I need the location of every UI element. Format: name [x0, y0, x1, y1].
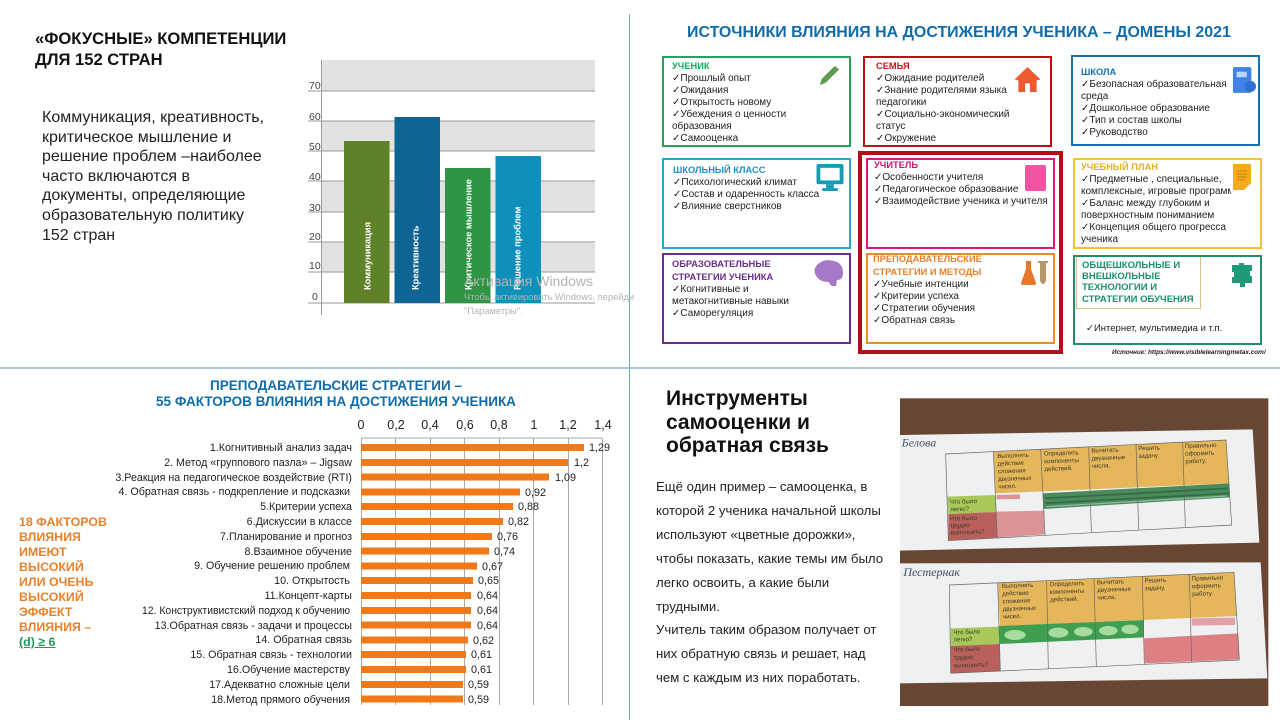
- bar chart: 18 factors: 0,6: [456, 418, 474, 432]
- inner heading box: СТРАТЕГИИ ОБУЧЕНИЯ: [1082, 294, 1194, 305]
- card text: classroom: ✓Влияние сверстников: [673, 201, 782, 212]
- card text: school: ✓Безопасная образовательная: [1081, 79, 1227, 90]
- heading: focus competencies: ДЛЯ 152 СТРАН: [35, 50, 163, 69]
- paper sheet 1: задачу.: [1138, 452, 1159, 460]
- card text: teacher: ✓Особенности учителя: [874, 172, 983, 183]
- paper sheet 2: чисел.: [1003, 613, 1022, 621]
- paper sheet 2: Вычитать: [1097, 578, 1124, 586]
- bar chart: 18 factors: 10. Открытость: [274, 575, 350, 587]
- card: school-wide technologies: [1073, 255, 1262, 345]
- card text: student learning strategies: ОБРАЗОВАТЕЛЬНЫЕ: [672, 259, 771, 269]
- bar chart: 18 factors: 15. Обратная связь - технологии: [190, 649, 352, 661]
- card text: internet: ✓Интернет, мультимедиа и т.п.: [1086, 323, 1222, 334]
- card text: school: ✓Тип и состав школы: [1081, 115, 1182, 126]
- paper sheet 1: Правильно: [1185, 442, 1217, 450]
- bar chart: 18 factors: 0,61: [471, 649, 492, 661]
- card: student: [662, 56, 851, 147]
- text block: self-assessment description: Учитель таким образом получает от: [656, 622, 876, 637]
- paper sheet 2: работу.: [1192, 590, 1213, 598]
- heading: domains: ИСТОЧНИКИ ВЛИЯНИЯ НА ДОСТИЖЕНИЯ УЧЕНИКА – ДОМЕНЫ 2021: [687, 24, 1231, 41]
- paper sheet 2: задачу.: [1145, 585, 1166, 592]
- icon: book with apple: [1232, 67, 1256, 93]
- bar chart: 18 factors: 0,8: [490, 418, 508, 432]
- heading: 55 factors: ПРЕПОДАВАТЕЛЬСКИЕ СТРАТЕГИИ –: [210, 378, 462, 393]
- card: family: [863, 56, 1052, 147]
- paper sheet 2: действий.: [1050, 596, 1079, 604]
- text block: competencies description: документы, определяющие: [42, 187, 245, 204]
- paper sheet 1: Вычитать: [1091, 447, 1119, 455]
- paper sheet 1: легко?: [950, 506, 970, 513]
- bar chart: 18 factors: 11.Концепт-карты: [265, 590, 352, 602]
- paper sheet 2: трудно: [953, 654, 974, 662]
- bar chart: 18 factors: 0,64: [477, 605, 498, 617]
- callout: 18 factors: ИМЕЮТ: [19, 545, 67, 559]
- bar chart: 18 factors: 3.Реакция на педагогическое воздействие (RTI): [115, 472, 352, 484]
- text block: competencies description: [42, 109, 264, 244]
- bar chart: competencies: 0: [312, 291, 318, 303]
- paper sheet 2: Что было: [953, 646, 980, 654]
- paper sheet 2: Решить: [1144, 577, 1166, 585]
- photo: student self-assessment sheets: [900, 398, 1268, 706]
- bar chart: 18 factors: 5.Критерии успеха: [260, 501, 352, 513]
- bar chart: 18 factors: 0,64: [477, 620, 498, 632]
- bar chart: 18 factors: 13.Обратная связь - задачи и процессы: [155, 620, 352, 632]
- paper sheet 2: Выполнять: [1002, 582, 1034, 590]
- paper sheet 1: сложения: [998, 467, 1026, 475]
- divider: horizontal: [0, 367, 1280, 369]
- bar chart: 18 factors: 4. Обратная связь - подкрепление и подсказки: [119, 486, 350, 498]
- paper sheet 1: компоненты: [1044, 457, 1079, 465]
- card text: school: ✓Дошкольное образование: [1081, 103, 1210, 114]
- paper sheet 1: [900, 429, 1259, 551]
- text block: self-assessment description: которой 2 ученика начальной школы: [656, 503, 881, 518]
- inner heading box: ТЕХНОЛОГИИ И: [1082, 282, 1157, 293]
- text block: self-assessment description: трудными.: [656, 599, 720, 614]
- icon: pink book: [1025, 165, 1046, 191]
- card text: family: ✓Знание родителями языка: [876, 85, 1007, 96]
- paper sheet 1: числа.: [1092, 462, 1111, 470]
- card text: teacher: [874, 160, 1048, 207]
- heading: self-assessment tools: Инструменты: [666, 387, 808, 410]
- bar chart: 18 factors: 0,61: [471, 664, 492, 676]
- card text: teaching strategies: ✓Критерии успеха: [873, 291, 959, 302]
- paper sheet 2: Пестернак: [902, 565, 960, 579]
- card text: curriculum: ученика: [1081, 234, 1118, 245]
- text block: self-assessment description: них обратную связь и решает, над: [656, 646, 866, 661]
- card text: student: УЧЕНИК: [672, 61, 710, 71]
- card text: student: ✓Ожидания: [672, 85, 728, 96]
- bar chart: 18 factors: 1,09: [555, 472, 576, 484]
- divider: vertical: [629, 14, 630, 720]
- paper sheet 1: Выполнять: [997, 452, 1029, 460]
- paper sheet 2: легко?: [953, 636, 973, 644]
- bar chart: competencies: 50: [309, 141, 321, 153]
- card text: teacher: ✓Взаимодействие ученика и учителя: [874, 196, 1048, 207]
- bar chart: competencies: 10: [309, 260, 321, 272]
- callout: 18 factors: ВЫСОКИЙ: [19, 590, 84, 604]
- card text: family: ✓Окружение: [876, 133, 936, 144]
- paper sheet 2: числа.: [1097, 594, 1116, 602]
- card text: teacher: УЧИТЕЛЬ: [874, 160, 918, 170]
- heading: 55 factors: 55 ФАКТОРОВ ВЛИЯНИЯ НА ДОСТИЖЕНИЯ УЧЕНИКА: [156, 394, 516, 409]
- paper sheet 2: сложения: [1002, 597, 1030, 605]
- frame: teacher domain group: [858, 151, 1063, 354]
- bar chart: 18 factors: 1,29: [589, 442, 610, 454]
- card text: teaching strategies: ПРЕПОДАВАТЕЛЬСКИЕ: [873, 254, 982, 264]
- bar chart: 18 factors: 0,64: [477, 590, 498, 602]
- paper sheet 2: [900, 562, 1267, 683]
- card text: curriculum: поверхностным пониманием: [1081, 210, 1214, 221]
- callout: 18 factors: [19, 515, 107, 649]
- bar chart: 18 factors: 16.Обучение мастерству: [227, 664, 351, 676]
- bar chart: competencies: Коммуникация: [362, 222, 372, 290]
- inner heading box: ВНЕШКОЛЬНЫЕ: [1082, 271, 1161, 282]
- bar chart: 18 factors: 0,88: [518, 501, 539, 513]
- paper sheet 2: компоненты: [1050, 588, 1085, 596]
- bar chart: 18 factors: 0,59: [468, 679, 489, 691]
- bar chart: 18 factors: 0: [358, 418, 365, 432]
- card text: student learning strategies: ✓Когнитивные и: [672, 284, 749, 295]
- card text: teaching strategies: ✓Обратная связь: [873, 315, 955, 326]
- callout: 18 factors: 18 ФАКТОРОВ: [19, 515, 107, 529]
- callout: 18 factors: (d) ≥ 6: [19, 635, 55, 649]
- bar chart: 18 factors: 0,4: [421, 418, 439, 432]
- card text: curriculum: ✓Предметные , специальные,: [1081, 174, 1222, 185]
- card text: classroom: ШКОЛЬНЫЙ КЛАСС: [673, 165, 765, 175]
- card: classroom: [662, 158, 851, 249]
- card text: student: ✓Прошлый опыт: [672, 73, 751, 84]
- icon: monitor: [816, 164, 844, 191]
- bar chart: competencies: Критическое мышление: [464, 179, 474, 290]
- card text: teaching strategies: ✓Стратегии обучения: [873, 303, 975, 314]
- callout: 18 factors: ЭФФЕКТ: [19, 605, 72, 619]
- card text: school: ✓Руководство: [1081, 127, 1148, 138]
- bar chart: 18 factors: 8.Взаимное обучение: [245, 546, 352, 558]
- text block: self-assessment description: используют «цветные дорожки»,: [656, 527, 855, 542]
- text block: self-assessment description: легко освоить, а какие были: [656, 575, 829, 590]
- card text: school: среда: [1081, 91, 1108, 102]
- card text: classroom: ✓Состав и одаренность класса: [673, 189, 819, 200]
- icon: flasks: [1021, 261, 1048, 285]
- paper sheet 2: выполнить?: [954, 661, 989, 670]
- callout: 18 factors: ВЫСОКИЙ: [19, 560, 84, 574]
- bar chart: competencies: Креативность: [410, 225, 420, 290]
- icon: house: [1014, 67, 1040, 92]
- bar chart: competencies: 70: [309, 80, 321, 92]
- callout: 18 factors: ВЛИЯНИЯ –: [19, 620, 91, 634]
- bar chart: 18 factors: 7.Планирование и прогноз: [220, 531, 352, 543]
- card text: family: ✓Социально-экономический: [876, 109, 1010, 120]
- paper sheet 2: Что было: [953, 628, 980, 636]
- card text: family: педагогики: [876, 97, 926, 108]
- card text: teacher: ✓Педагогическое образование: [874, 184, 1018, 195]
- text block: self-assessment description: чтобы показать, какие темы им было: [656, 551, 883, 566]
- bar chart: 18 factors: 1,2: [559, 418, 577, 432]
- bar chart: competencies: [308, 60, 595, 315]
- icon: pencil: [820, 66, 840, 85]
- bar chart: 18 factors: 0,59: [468, 694, 489, 706]
- heading: self-assessment tools: самооценки и: [666, 411, 810, 434]
- paper sheet 1: Белова: [901, 436, 936, 450]
- paper sheet 1: выполнить?: [950, 528, 985, 537]
- bar chart: 18 factors: 2. Метод «группового пазла» – Jigsaw: [164, 457, 352, 469]
- card text: curriculum: УЧЕБНЫЙ ПЛАН: [1081, 162, 1158, 172]
- paper sheet 1: двузначных: [998, 475, 1033, 483]
- card text: student learning strategies: ✓Саморегуляция: [672, 308, 753, 319]
- paper sheet 1: трудно: [950, 522, 970, 530]
- bar chart: 18 factors: 9. Обучение решению проблем: [194, 560, 350, 572]
- bar chart: competencies: 40: [309, 171, 321, 183]
- text block: self-assessment description: Ещё один пример – самооценка, в: [656, 479, 867, 494]
- panel: influence domains: [662, 24, 1266, 356]
- card text: student learning strategies: [672, 259, 789, 319]
- bar chart: 18 factors: 0,74: [494, 546, 515, 558]
- text block: competencies description: часто включаются в: [42, 168, 190, 185]
- bar chart: 18 factors: 0,2: [387, 418, 405, 432]
- callout: 18 factors: ВЛИЯНИЯ: [19, 530, 81, 544]
- paper sheet 1: действий.: [1044, 465, 1073, 473]
- bar chart: 18 factors: [115, 418, 612, 706]
- card text: family: статус: [876, 121, 905, 132]
- bar chart: 18 factors: 17.Адекватно сложные цели: [209, 679, 350, 691]
- icon: puzzle: [1232, 263, 1252, 287]
- card: school: [1071, 55, 1260, 146]
- bar chart: 18 factors: 1: [531, 418, 538, 432]
- icon: brain: [814, 260, 843, 286]
- text block: competencies description: образовательную политику: [42, 207, 244, 224]
- callout: 18 factors: ИЛИ ОЧЕНЬ: [19, 575, 93, 589]
- card text: student: образования: [672, 121, 732, 132]
- card text: teaching strategies: ✓Учебные интенции: [873, 279, 969, 290]
- bar chart: 18 factors: 0,65: [478, 575, 499, 587]
- card text: family: ✓Ожидание родителей: [876, 73, 984, 84]
- card text: classroom: ✓Психологический климат: [673, 177, 797, 188]
- bar chart: 18 factors: 12. Конструктивистский подход к обучению: [142, 605, 350, 617]
- text block: self-assessment description: [656, 479, 883, 685]
- bar chart: competencies: 60: [309, 111, 321, 123]
- card text: curriculum: ✓Концепция общего прогресса: [1081, 222, 1226, 233]
- card: student learning strategies: [662, 253, 851, 344]
- card text: student: [672, 61, 786, 144]
- paper sheet 2: двузначные: [1097, 586, 1132, 594]
- text block: self-assessment description: чем с каждым из них поработать.: [656, 670, 861, 685]
- text block: competencies description: решение проблем –наиболее: [42, 148, 262, 165]
- bar chart: 18 factors: 6.Дискуссии в классе: [247, 516, 352, 528]
- card: teaching strategies: [866, 253, 1055, 344]
- watermark: Windows activation: [464, 273, 634, 316]
- bar chart: competencies: Решение проблем: [512, 207, 522, 290]
- bar chart: 18 factors: 1,4: [594, 418, 612, 432]
- bar chart: 18 factors: 0,92: [525, 487, 546, 499]
- heading: self-assessment tools: обратная связь: [666, 434, 829, 457]
- heading: focus competencies: «ФОКУСНЫЕ» КОМПЕТЕНЦИИ: [35, 29, 286, 48]
- card text: student learning strategies: метакогнитивные навыки: [672, 296, 789, 307]
- card text: family: [876, 61, 1010, 144]
- card text: school: [1081, 67, 1227, 138]
- paper sheet 1: оформить: [1185, 450, 1214, 458]
- card text: student learning strategies: СТРАТЕГИИ УЧЕНИКА: [672, 272, 773, 282]
- paper sheet 2: двузначных: [1003, 605, 1037, 613]
- bar chart: 18 factors: 1,2: [574, 457, 589, 469]
- inner heading box: ОБЩЕШКОЛЬНЫЕ И: [1082, 260, 1180, 270]
- paper sheet 1: Определить: [1044, 449, 1079, 458]
- bar chart: 18 factors: 0,62: [473, 635, 494, 647]
- card text: curriculum: ✓Баланс между глубоким и: [1081, 198, 1210, 209]
- card text: classroom: [673, 164, 820, 212]
- paper sheet 1: Что было: [950, 498, 977, 506]
- paper sheet 1: Что было: [950, 515, 977, 523]
- paper sheet 1: двузначные: [1091, 454, 1126, 462]
- watermark: Windows activation: "Параметры".: [464, 306, 523, 316]
- bar chart: 18 factors: 0,82: [508, 516, 529, 528]
- bar chart: 18 factors: 0,67: [482, 561, 503, 573]
- paper sheet 1: действие: [997, 460, 1025, 468]
- bar chart: 18 factors: 0,76: [497, 531, 518, 543]
- bar chart: 18 factors: 14. Обратная связь: [255, 634, 352, 646]
- bar chart: 18 factors: 1.Когнитивный анализ задач: [210, 442, 352, 454]
- paper sheet 2: действие: [1002, 590, 1029, 598]
- card text: teaching strategies: СТРАТЕГИИ И МЕТОДЫ: [873, 267, 981, 277]
- text block: competencies description: Коммуникация, креативность,: [42, 109, 264, 126]
- icon: note: [1233, 164, 1251, 190]
- card text: student: ✓Убеждения о ценности: [672, 109, 786, 120]
- source note: Источник: https://www.visiblelearningmetax.com/: [1112, 349, 1266, 356]
- card: teacher: [866, 158, 1055, 249]
- panel: focus competencies: [35, 29, 595, 315]
- paper sheet 1: чисел.: [998, 483, 1017, 491]
- heading: 55 factors: [156, 378, 516, 409]
- bar chart: competencies: 30: [309, 202, 321, 214]
- card text: teaching strategies: [873, 254, 982, 326]
- bar chart: competencies: 20: [309, 231, 321, 243]
- watermark: Windows activation: Активация Windows: [464, 273, 593, 289]
- text block: competencies description: критическое мышление и: [42, 129, 231, 146]
- card text: curriculum: [1081, 162, 1231, 245]
- panel: self-assessment: [656, 387, 883, 685]
- card text: family: СЕМЬЯ: [876, 61, 910, 71]
- paper sheet 2: Правильно: [1191, 575, 1223, 583]
- inner heading box: [1076, 257, 1201, 309]
- text block: competencies description: 152 стран: [42, 227, 115, 244]
- card text: student: ✓Самооценка: [672, 133, 738, 144]
- paper sheet 2: оформить: [1192, 582, 1221, 590]
- panel: teaching strategies factors: [19, 378, 516, 649]
- paper sheet 1: Решить: [1138, 445, 1160, 452]
- heading: self-assessment tools: [666, 387, 829, 457]
- heading: focus competencies: [35, 29, 286, 69]
- paper sheet 1: работу.: [1185, 458, 1207, 465]
- card text: school: ШКОЛА: [1081, 67, 1116, 77]
- paper sheet 2: Определить: [1049, 580, 1084, 588]
- bar chart: 18 factors: 18.Метод прямого обучения: [211, 694, 350, 706]
- card: curriculum: [1073, 158, 1262, 249]
- card text: student: ✓Открытость новому: [672, 97, 771, 108]
